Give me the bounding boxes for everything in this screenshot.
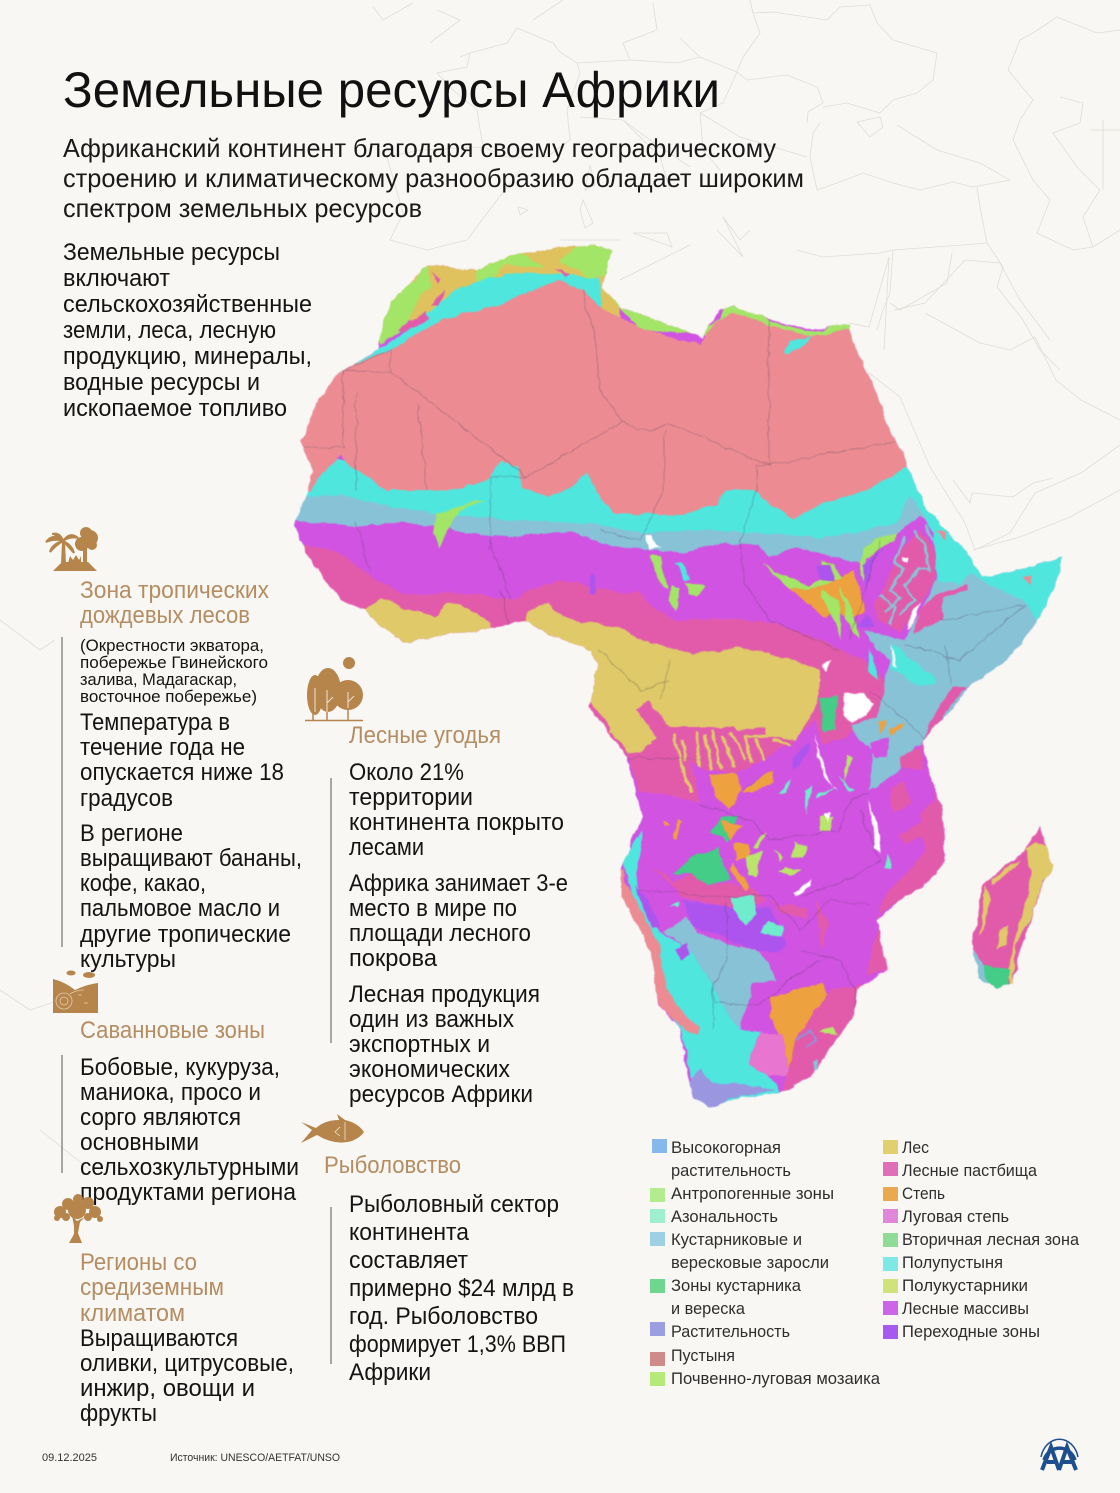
body text: один из важных bbox=[349, 1006, 514, 1033]
body text bbox=[349, 1191, 574, 1386]
map of Africa land resources bbox=[280, 230, 1080, 1120]
body text: основными bbox=[80, 1129, 199, 1156]
body text: Лесная продукция bbox=[349, 981, 540, 1008]
intro text: продукцию, минералы, bbox=[63, 343, 312, 370]
zone: semi-shrub south Congo bbox=[747, 755, 853, 877]
body text: сельхозкультурными bbox=[80, 1154, 299, 1181]
zone: Tanzania shrub bbox=[853, 717, 915, 790]
body text bbox=[349, 759, 568, 1108]
patches: river fingers bbox=[610, 722, 792, 793]
intro text: включают bbox=[63, 265, 170, 292]
body text bbox=[80, 709, 302, 973]
legend column 1 labels: Кустарниковые и bbox=[671, 1230, 802, 1249]
body text: фрукты bbox=[80, 1400, 157, 1427]
body text: лесами bbox=[349, 834, 424, 861]
legend column 2 swatches bbox=[883, 1140, 898, 1339]
zone: northern Mediterranean yellow bbox=[380, 240, 620, 320]
zone: Kenya coast pasture bbox=[900, 687, 967, 770]
legend column 1 labels: Зоны кустарника bbox=[671, 1276, 802, 1295]
legend column 1 labels: Почвенно-луговая мозаика bbox=[671, 1369, 881, 1388]
zone: south-central pasture bbox=[650, 867, 828, 950]
zone: east forest bbox=[1008, 843, 1056, 990]
body text: В регионе bbox=[80, 820, 183, 847]
legend column 2 labels: Вторичная лесная зона bbox=[902, 1230, 1080, 1249]
rule bbox=[62, 637, 63, 947]
zone: Sudan purple bbox=[590, 547, 883, 627]
subtitle: строению и климатическому разнообразию обладает широким bbox=[63, 163, 804, 193]
Madagascar bbox=[965, 820, 1060, 995]
zone: transition purple Kalahari bbox=[634, 885, 787, 953]
zone: Kwango steppe bbox=[708, 770, 775, 810]
patch: Libya oasis bbox=[783, 336, 812, 356]
legend column 1 labels: Растительность bbox=[671, 1322, 790, 1341]
heading: Саванновые зоны bbox=[80, 1017, 265, 1044]
body text: Около 21% bbox=[349, 759, 464, 786]
zone: Horn shrub bbox=[850, 573, 1040, 790]
zone: south-east pasture bbox=[780, 985, 865, 1100]
intro text: Земельные ресурсы bbox=[63, 239, 280, 266]
patch: Ethiopia lake bbox=[902, 557, 908, 562]
legend column 2 labels: Полупустыня bbox=[902, 1253, 1003, 1272]
zone: Congo magenta south bbox=[621, 720, 945, 918]
heading: Зона тропических bbox=[80, 577, 269, 604]
patches: Ethiopia shrub veins bbox=[880, 525, 933, 625]
legend column 2 labels: Лесные пастбища bbox=[902, 1161, 1038, 1180]
zone: Ethiopia highlands bbox=[865, 515, 937, 600]
legend bbox=[650, 1138, 1080, 1388]
body text: экспортных и bbox=[349, 1031, 490, 1058]
legend column 2 labels: Степь bbox=[902, 1184, 945, 1203]
body text: экономических bbox=[349, 1056, 510, 1083]
legend column 1 labels: и вереска bbox=[671, 1299, 746, 1318]
body text: год. Рыболовство bbox=[349, 1303, 538, 1330]
zone: forest massifs base bbox=[280, 230, 1080, 1120]
body text bbox=[80, 1325, 294, 1427]
rule bbox=[330, 1207, 332, 1364]
body text: примерно $24 млрд в bbox=[349, 1275, 574, 1302]
legend column 1 labels: Антропогенные зоны bbox=[671, 1184, 834, 1203]
body text: Температура в bbox=[80, 709, 230, 736]
rule bbox=[330, 778, 332, 1043]
zone: Sahara desert bbox=[280, 280, 930, 518]
zone: central forest yellow bbox=[520, 602, 827, 752]
body text: Африки bbox=[349, 1359, 431, 1386]
body text: выращивают бананы, bbox=[80, 845, 302, 872]
icon: olive tree bbox=[54, 1194, 103, 1243]
zone: south steppe bbox=[770, 983, 828, 1077]
legend column 1 labels: Высокогорная bbox=[671, 1138, 781, 1157]
heading: климатом bbox=[80, 1300, 185, 1327]
body text: площади лесного bbox=[349, 920, 531, 947]
legend column 1 labels: вересковые заросли bbox=[671, 1253, 829, 1272]
zone: Rift teal bbox=[868, 643, 935, 687]
body text: континента покрыто bbox=[349, 809, 564, 836]
zone: south green bbox=[972, 965, 1010, 990]
subtitle: Африканский континент благодаря своему географическому bbox=[63, 133, 776, 163]
zone: Sudan green and steppe bbox=[433, 500, 897, 590]
intro text: сельскохозяйственные bbox=[63, 291, 312, 318]
body text bbox=[80, 1054, 299, 1206]
heading: Регионы со bbox=[80, 1249, 197, 1276]
patches: highveld details bbox=[797, 1030, 816, 1048]
subtitle: спектром земельных ресурсов bbox=[63, 193, 422, 223]
legend column 2 labels: Полукустарники bbox=[902, 1276, 1028, 1295]
body text: оливки, цитрусовые, bbox=[80, 1350, 294, 1377]
legend column 1 swatches bbox=[650, 1139, 667, 1386]
zone: north-east semi-desert bbox=[918, 492, 1063, 670]
zone: northern semi-desert band bbox=[338, 272, 602, 380]
heading: средиземным bbox=[80, 1274, 224, 1301]
country borders bbox=[300, 290, 1025, 1030]
body text: культуры bbox=[80, 946, 176, 973]
heading: Лесные угодья bbox=[349, 722, 501, 749]
zone: Zambezi green block bbox=[672, 694, 839, 886]
heading: дождевых лесов bbox=[80, 602, 250, 629]
intro text bbox=[63, 239, 312, 422]
location note: (Окрестности экватора, bbox=[80, 636, 264, 655]
patches: west yellow bbox=[980, 860, 1020, 950]
zone: upper Zambezi steppe bbox=[665, 820, 750, 892]
zone: guinea coast forest bbox=[364, 598, 492, 644]
zone: shrub and heath band bbox=[296, 494, 927, 563]
zone: azonal over Kalahari bbox=[730, 897, 783, 936]
zone: coastal desert strip bbox=[615, 868, 700, 1034]
subtitle bbox=[63, 133, 804, 223]
zone: Sahel semi-desert bbox=[296, 458, 951, 544]
patches: azonal streams bbox=[670, 775, 892, 936]
body text: составляет bbox=[349, 1247, 468, 1274]
panel: savanna zones bbox=[53, 970, 299, 1206]
icon: fish bbox=[301, 1114, 364, 1143]
panel: fishing bbox=[301, 1114, 574, 1386]
panel: tropical rainforest bbox=[46, 527, 302, 973]
legend column 2 labels: Луговая степь bbox=[902, 1207, 1009, 1226]
body text: формирует 1,3% ВВП bbox=[349, 1331, 566, 1358]
body text: кофе, какао, bbox=[80, 870, 206, 897]
body text: континента bbox=[349, 1219, 470, 1246]
body text: ресурсов Африки bbox=[349, 1081, 533, 1108]
legend column 2 labels: Лесные массивы bbox=[902, 1299, 1029, 1318]
body text: Бобовые, кукуруза, bbox=[80, 1054, 280, 1081]
legend column 1 labels bbox=[671, 1138, 881, 1388]
zone: great lakes pasture bbox=[818, 669, 854, 732]
zone: small purple block bbox=[675, 942, 690, 960]
legend column 2 labels: Переходные зоны bbox=[902, 1322, 1040, 1341]
body text: территории bbox=[349, 784, 473, 811]
lakes bbox=[646, 535, 898, 896]
panel: forest lands bbox=[305, 657, 568, 1108]
patch: Somali coastal spots bbox=[935, 530, 1033, 585]
intro text: водные ресурсы и bbox=[63, 369, 260, 396]
body text: маниока, просо и bbox=[80, 1079, 261, 1106]
footer date: 09.12.2025 bbox=[42, 1452, 97, 1464]
icon: forest bbox=[305, 657, 363, 720]
location note: восточное побережье) bbox=[80, 687, 257, 706]
body text: Выращиваются bbox=[80, 1325, 238, 1352]
intro text: ископаемое топливо bbox=[63, 395, 287, 422]
icon: AA agency logo bbox=[1041, 1439, 1078, 1470]
title: Земельные ресурсы Африки bbox=[63, 62, 720, 118]
icon: palm and tree bbox=[46, 527, 98, 571]
body text: сорго являются bbox=[80, 1104, 241, 1131]
body text: место в мире по bbox=[349, 895, 517, 922]
body text: течение года не bbox=[80, 734, 245, 761]
location note: залива, Мадагаскар, bbox=[80, 670, 237, 689]
legend column 1 labels: растительность bbox=[671, 1161, 791, 1180]
legend column 1 labels: Азональность bbox=[671, 1207, 778, 1226]
rule bbox=[62, 1055, 63, 1173]
zone: Ethiopia pasture bbox=[875, 530, 937, 632]
legend column 2 labels: Лес bbox=[902, 1138, 929, 1157]
body text: покрова bbox=[349, 945, 438, 972]
zone: south shrub bbox=[970, 945, 990, 985]
zone: eastern pasture strip bbox=[866, 780, 946, 976]
body text: продуктами региона bbox=[80, 1179, 297, 1206]
zone: forest massifs Sudanian bbox=[294, 520, 865, 596]
heading bbox=[80, 1249, 224, 1327]
patches: magenta in Tanzania bbox=[870, 737, 890, 757]
location note bbox=[80, 636, 268, 706]
faint background map of neighbouring lands bbox=[0, 0, 1120, 1170]
body text: Рыболовный сектор bbox=[349, 1191, 559, 1218]
patches: pink in Atlas bbox=[398, 268, 570, 332]
zone: south Ethiopia pasture arc bbox=[913, 585, 967, 633]
zone: Sudan steppe bbox=[789, 570, 865, 620]
zone: pasture bbox=[965, 820, 1060, 995]
body text: другие тропические bbox=[80, 921, 291, 948]
intro text: земли, леса, лесную bbox=[63, 317, 276, 344]
zone: southern meadow steppe bbox=[748, 1032, 790, 1077]
body text: градусов bbox=[80, 785, 173, 812]
legend column 1 labels: Пустыня bbox=[671, 1346, 735, 1365]
zone: southwestern semi-desert bbox=[623, 830, 780, 1110]
zone: purple strips north Congo bbox=[745, 743, 810, 790]
zone: Botswana shrub bbox=[663, 917, 777, 1030]
zone: northern green patches bbox=[375, 240, 855, 345]
panel: mediterranean climate regions bbox=[54, 1194, 294, 1427]
body text: пальмовое масло и bbox=[80, 895, 280, 922]
heading: Рыболовство bbox=[324, 1152, 461, 1179]
body text: опускается ниже 18 bbox=[80, 759, 284, 786]
zone: cape vegetation bbox=[690, 1068, 775, 1110]
footer source: Источник: UNESCO/AETFAT/UNSO bbox=[170, 1452, 340, 1464]
zone: forest pasture band bbox=[290, 545, 885, 803]
icon: savanna landscape bbox=[53, 970, 98, 1013]
location note: побережье Гвинейского bbox=[80, 653, 268, 672]
body text: Африка занимает 3-е bbox=[349, 870, 568, 897]
legend column 2 labels bbox=[902, 1138, 1080, 1341]
heading bbox=[80, 577, 269, 629]
body text: инжир, овощи и bbox=[80, 1375, 255, 1402]
